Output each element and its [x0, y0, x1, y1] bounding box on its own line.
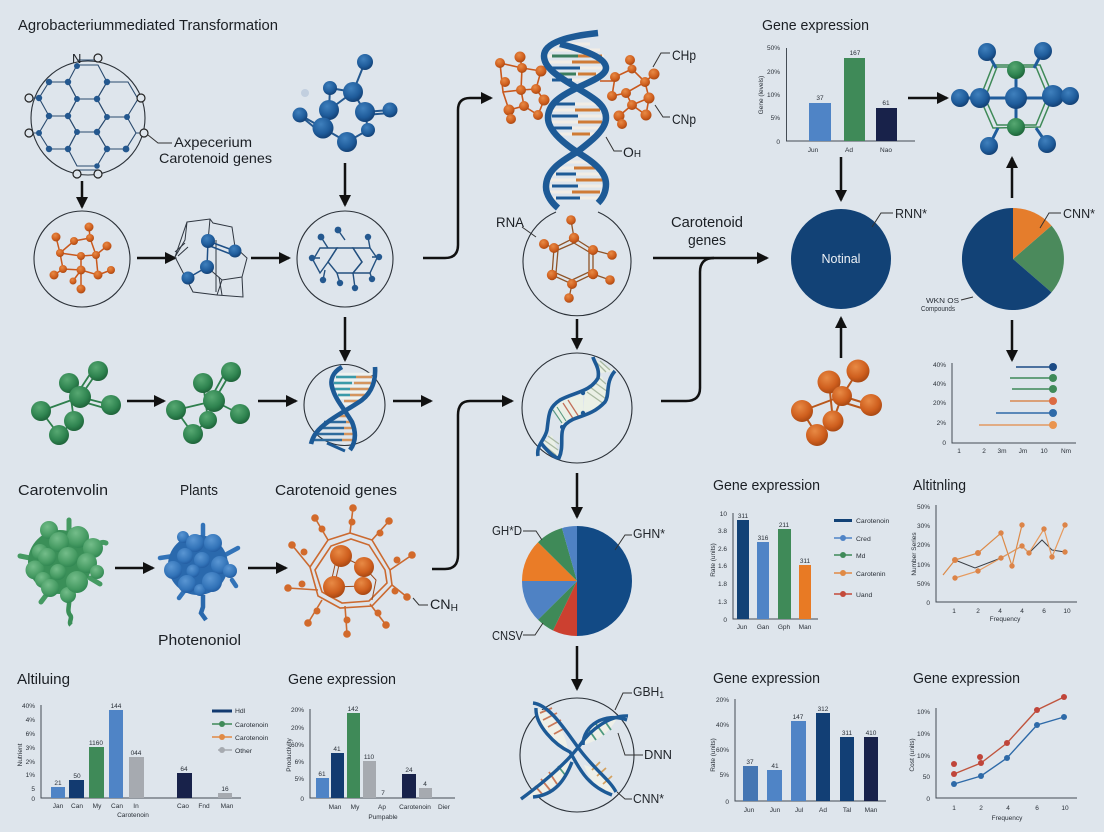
- bar chart: bottom left: Can: [71, 803, 83, 810]
- arrow: elbow to DNA: [423, 98, 491, 258]
- bar chart: top: 0: [776, 139, 780, 146]
- label: Carotenoid genes: Carotenoid genes: [275, 482, 397, 499]
- bar chart: bottom right: Jun: [770, 807, 781, 814]
- heading: Gene expression bottom 2: Gene expression: [713, 670, 820, 687]
- label: Axpecerium Carotenoid genes: [148, 134, 272, 166]
- bar chart: bottom left: Fnd: [198, 803, 210, 810]
- lollipop chart: Nm: [1061, 448, 1071, 455]
- lollipop chart: 40%: [933, 362, 946, 369]
- lollipop chart: 10: [1040, 448, 1048, 455]
- line chart: mid right: [911, 504, 1077, 623]
- bar chart: bottom centre-left: Ap: [378, 804, 386, 811]
- icon: blue protein cluster: [160, 525, 238, 620]
- bar chart: bottom centre-left: Productivity: [286, 737, 293, 772]
- label: GBH: 1: [659, 690, 664, 700]
- bar chart: bottom left: 1%: [26, 772, 35, 779]
- bar chart: bottom right: 147: [793, 714, 804, 721]
- label: GH*D: [492, 523, 542, 540]
- line chart: mid right: 50%: [917, 504, 930, 511]
- label: WKN OS Compounds: Compounds: [921, 306, 955, 313]
- label: Carotenoid genes centre: [671, 214, 743, 249]
- arrow: [115, 567, 153, 569]
- orange molecule right of DNA: [600, 55, 660, 129]
- bar chart: top: [758, 45, 915, 154]
- legend: bottom left: Hdl: [235, 708, 246, 715]
- heading: Gene expression bottom 3: Gene expression: [913, 670, 1020, 687]
- bar chart: top: 10%: [767, 92, 780, 99]
- bar chart: bottom right: 37: [746, 759, 754, 766]
- bar chart: bottom centre-left: 0: [300, 796, 304, 803]
- label: CNSV: CNSV: [492, 628, 523, 643]
- molecule: hexagonal lattice in circle: [25, 51, 148, 178]
- heading: Gene expression mid: Gene expression: [713, 477, 820, 494]
- line chart: mid right: 4: [1020, 608, 1024, 615]
- bar chart: bottom left: [17, 703, 241, 819]
- bar chart: bottom right: Tal: [843, 807, 852, 814]
- label: Axpecerium Carotenoid genes: Carotenoid genes: [159, 150, 272, 166]
- bar chart: bottom centre-left: Dier: [438, 804, 451, 811]
- bar chart: top: 167: [850, 50, 861, 57]
- bar chart: mid right: 2.6: [718, 546, 727, 553]
- line chart: bottom right: 6: [1035, 805, 1039, 812]
- crossed DNA in circle: [520, 698, 634, 812]
- bar chart: bottom left: 144: [111, 703, 122, 710]
- lollipop chart: 2: [982, 448, 986, 455]
- line chart: mid right: 50%: [917, 581, 930, 588]
- arrow: [251, 257, 289, 259]
- label: Carotenvolin: Carotenvolin: [18, 482, 108, 499]
- line chart: bottom right: 10: [1061, 805, 1069, 812]
- bar chart: top: 37: [816, 95, 824, 102]
- arrow: horizontal to Notinal: [653, 257, 767, 259]
- bar chart: mid right: Rate (units): [710, 543, 717, 577]
- bar chart: bottom right: 312: [818, 706, 829, 713]
- bar chart: bottom left: 2%: [26, 759, 35, 766]
- arrow: [576, 646, 578, 689]
- bar chart: top: 5%: [771, 115, 780, 122]
- line chart: bottom right: 10%: [917, 709, 930, 716]
- label: DNN: [618, 733, 672, 762]
- bar chart: mid right: 10: [720, 511, 727, 518]
- label: RNA: [496, 214, 536, 237]
- label: CNp: CNp: [672, 111, 696, 127]
- molecule: blue rings in circle: [297, 211, 393, 307]
- legend: bottom left: Carotenoin: [235, 722, 268, 729]
- line chart: mid right: 4: [998, 608, 1002, 615]
- arrow: [1011, 158, 1013, 198]
- orange molecule left of DNA: [495, 52, 550, 124]
- bar chart: bottom centre-left: Pumpable: [368, 814, 398, 821]
- bar chart: bottom left: 5: [31, 786, 35, 793]
- line chart: bottom right: Frequency: [992, 815, 1023, 822]
- line chart: mid right: 10: [1063, 608, 1071, 615]
- legend: bottom left: Other: [235, 748, 253, 755]
- bar chart: bottom centre-left: 24: [405, 767, 413, 774]
- bar chart: top: Gene (levels): [758, 76, 765, 114]
- label: RNA: RNA: [496, 214, 525, 230]
- bar chart: bottom centre-left: 6%: [295, 759, 304, 766]
- bar chart: bottom right: 5%: [720, 772, 729, 779]
- legend: mid right: Carotenoin: [856, 518, 889, 525]
- bar chart: bottom centre-left: Carotenoin: [399, 804, 431, 811]
- line chart: mid right: Frequency: [990, 616, 1021, 623]
- DNA fragment in circle: [522, 353, 632, 463]
- label: CN H: CN: [430, 596, 450, 612]
- arrow: [840, 157, 842, 200]
- large DNA double helix: [544, 33, 606, 208]
- bar chart: bottom centre-left: 142: [348, 706, 359, 713]
- bar chart: bottom right: 40%: [716, 722, 729, 729]
- bar chart: mid right: 1.3: [718, 599, 727, 606]
- line chart: bottom right: 0: [926, 796, 930, 803]
- heading: Altiluing: Altiluing: [17, 671, 70, 688]
- bar chart: bottom right: 41: [771, 763, 779, 770]
- bar chart: mid right: [710, 511, 818, 631]
- pie chart: right: [962, 208, 1064, 310]
- bar chart: bottom centre-left: 4: [423, 781, 427, 788]
- bar chart: bottom right: 0: [725, 799, 729, 806]
- arrow: elbow to DNA circle: [432, 401, 512, 569]
- bar chart: bottom right: Man: [865, 807, 878, 814]
- bar chart: bottom right: 20%: [716, 697, 729, 704]
- lollipop chart: [933, 362, 1076, 455]
- bar chart: top: 50%: [767, 45, 780, 52]
- molecule: blue and green network: [951, 42, 1079, 155]
- bar chart: bottom left: 50: [73, 773, 81, 780]
- molecule: green right: [166, 362, 250, 444]
- molecule: hexagonal lattice in circle: N: [72, 51, 81, 66]
- bar chart: bottom left: Can: [111, 803, 123, 810]
- label: Plants: Plants: [180, 482, 218, 499]
- bar chart: bottom right: [710, 697, 886, 814]
- bar chart: bottom left: My: [93, 803, 102, 810]
- bar chart: bottom left: 044: [131, 750, 142, 757]
- bar chart: mid right: Gan: [757, 624, 770, 631]
- bar chart: bottom centre-left: 41: [333, 746, 341, 753]
- bar chart: top: Nao: [880, 147, 892, 154]
- label: OH: OH: [623, 144, 641, 160]
- heading: Gene expression bottom 1: Gene expression: [288, 671, 396, 688]
- bar chart: mid right: Gph: [778, 624, 791, 631]
- bar chart: top: Jun: [808, 147, 819, 154]
- arrow: [258, 400, 296, 402]
- label: CHp: [653, 47, 696, 67]
- bar chart: bottom left: 16: [221, 786, 229, 793]
- bar chart: bottom centre-left: 60%: [291, 742, 304, 749]
- arrow: [840, 318, 842, 358]
- label: GHN*: GHN*: [633, 526, 665, 541]
- bar chart: bottom centre-left: 110: [364, 754, 375, 761]
- lollipop chart: 1: [957, 448, 961, 455]
- arrow: [137, 257, 175, 259]
- legend: mid right: Cred: [856, 536, 871, 543]
- label: Carotenoid genes centre: genes: [688, 232, 726, 249]
- bar chart: bottom left: Cao: [177, 803, 189, 810]
- molecule: blue cage: [175, 219, 247, 297]
- bar chart: mid right: 1.6: [718, 563, 727, 570]
- arrow: [576, 473, 578, 517]
- lollipop chart: 3m: [997, 448, 1007, 455]
- label: CNN* right: [1040, 206, 1095, 228]
- bar chart: bottom left: 21: [54, 780, 62, 787]
- label: DNN: DNN: [644, 747, 672, 762]
- bar chart: bottom centre-left: My: [351, 804, 360, 811]
- bar chart: mid right: Jun: [737, 624, 748, 631]
- bar chart: top: 20%: [767, 69, 780, 76]
- line chart: bottom right: 2: [979, 805, 983, 812]
- label: GHN*: [615, 526, 665, 550]
- bar chart: bottom left: Jan: [53, 803, 64, 810]
- legend: mid right: Uand: [856, 592, 872, 599]
- line chart: bottom right: 10%: [917, 731, 930, 738]
- bar chart: bottom right: Rate (units): [710, 738, 717, 772]
- bar chart: bottom right: Jul: [795, 807, 804, 814]
- legend: mid right: Md: [856, 553, 866, 560]
- molecule: blue ball and stick: [292, 54, 398, 152]
- bar chart: bottom left: 6%: [26, 731, 35, 738]
- legend: bottom left: Carotenoin: [235, 735, 268, 742]
- bar chart: mid right: 0: [723, 617, 727, 624]
- bar chart: top: Ad: [845, 147, 853, 154]
- bar chart: bottom right: 60%: [716, 747, 729, 754]
- line chart: bottom right: 4: [1006, 805, 1010, 812]
- bar chart: mid right: 316: [758, 535, 769, 542]
- bar chart: bottom left: 64: [180, 766, 188, 773]
- line chart: mid right: 10%: [917, 562, 930, 569]
- label: CHp: CHp: [672, 47, 696, 63]
- label: RNN*: [872, 206, 927, 227]
- label: GBH: GBH: [633, 684, 661, 699]
- line chart: mid right: 30%: [917, 523, 930, 530]
- bar chart: bottom right: Ad: [819, 807, 827, 814]
- bar chart: mid right: Man: [799, 624, 812, 631]
- arrow: [344, 317, 346, 360]
- label: Axpecerium Carotenoid genes: Axpecerium: [174, 134, 252, 150]
- arrow: [248, 567, 286, 569]
- bar chart: mid right: 211: [779, 522, 790, 529]
- bar chart: bottom centre-left: 61: [318, 771, 326, 778]
- arrow: elbow joining horizontal: [661, 258, 714, 401]
- bar chart: bottom centre-left: 20%: [291, 725, 304, 732]
- bar chart: mid right: 311: [738, 513, 749, 520]
- label: CNSV: [492, 623, 543, 643]
- lollipop chart: 40%: [933, 381, 946, 388]
- label: WKN OS Compounds: [921, 296, 973, 313]
- Notinal circle: Notinal: [822, 252, 860, 266]
- label: RNN*: RNN*: [895, 206, 927, 221]
- bar chart: bottom left: 40%: [22, 703, 35, 710]
- bar chart: bottom centre-left: [286, 706, 455, 821]
- title: Agrobacteriummediated Transformation: [18, 17, 278, 34]
- bar chart: bottom left: In: [133, 803, 139, 810]
- arrow: [576, 319, 578, 348]
- bar chart: bottom centre-left: 7: [381, 790, 385, 797]
- arrow: [127, 400, 164, 402]
- bar chart: bottom right: Jun: [744, 807, 755, 814]
- bar chart: bottom left: Nutrient: [17, 743, 24, 766]
- label: CNN* bottom: [617, 791, 664, 806]
- bar chart: top: 61: [882, 100, 890, 107]
- molecule: green left: [31, 361, 121, 445]
- line chart: mid right: 20%: [917, 542, 930, 549]
- bar chart: bottom left: 4%: [26, 717, 35, 724]
- line chart: mid right: 6: [1042, 608, 1046, 615]
- line chart: mid right: 0: [926, 600, 930, 607]
- label: Photenoniol: Photenoniol: [158, 632, 241, 649]
- DNA in small circle: [304, 364, 385, 451]
- label: OH: [606, 137, 641, 160]
- bar chart: bottom centre-left: 20%: [291, 707, 304, 714]
- label: CN H: [413, 596, 458, 614]
- label: Carotenoid genes centre: Carotenoid: [671, 214, 743, 231]
- arrow: [908, 97, 947, 99]
- lollipop chart: 2%: [937, 420, 946, 427]
- line chart: bottom right: Cost (units): [909, 738, 916, 772]
- arrow: lattice to orange molecule: [81, 181, 83, 207]
- lollipop chart: 0: [942, 440, 946, 447]
- lollipop chart: 20%: [933, 400, 946, 407]
- bar chart: bottom left: 1160: [89, 740, 103, 747]
- bar chart: mid right: 311: [800, 558, 811, 565]
- bar chart: bottom left: Man: [221, 803, 234, 810]
- label: CNp: [655, 105, 696, 127]
- line chart: mid right: 2: [976, 608, 980, 615]
- arrow: [344, 163, 346, 205]
- heading: Altitnling: Altitnling: [913, 477, 966, 494]
- bar chart: bottom left: 3%: [26, 745, 35, 752]
- line chart: mid right: Number Series: [911, 532, 918, 576]
- legend: bottom left: [212, 708, 268, 755]
- lollipop chart: Jm: [1019, 448, 1027, 455]
- line chart: bottom right: 1: [952, 805, 956, 812]
- molecule: orange in circle: [34, 211, 130, 307]
- bar chart: bottom centre-left: Man: [329, 804, 342, 811]
- arrow: [1011, 320, 1013, 360]
- bar chart: bottom right: 311: [842, 730, 853, 737]
- line chart: bottom right: [909, 694, 1077, 822]
- heading: Gene expression top: Gene expression: [762, 17, 869, 34]
- benzene-style orange molecule in circle: [523, 212, 631, 316]
- pie chart: centre: [522, 526, 632, 636]
- bar chart: bottom right: 410: [866, 730, 877, 737]
- bar chart: mid right: 3.8: [718, 528, 727, 535]
- bar chart: bottom left: Carotenoin: [117, 812, 149, 819]
- line chart: mid right: 1: [952, 608, 956, 615]
- arrow: [393, 400, 431, 402]
- line chart: bottom right: 10%: [917, 753, 930, 760]
- legend: mid right: Carotenin: [856, 571, 886, 578]
- legend: mid right: [834, 518, 889, 599]
- Notinal circle: [791, 209, 891, 309]
- line chart: bottom right: 50: [923, 774, 930, 781]
- bar chart: mid right: 1.8: [718, 581, 727, 588]
- icon: green protein cluster: [20, 520, 106, 625]
- label: GH*D: GH*D: [492, 523, 522, 538]
- label: WKN OS Compounds: WKN OS: [926, 296, 959, 305]
- icon: orange ring molecule: [284, 504, 416, 638]
- label: CN H: H: [451, 603, 458, 614]
- label: GBH: [615, 684, 664, 710]
- bar chart: bottom left: 0: [31, 796, 35, 803]
- molecule: orange balls: [791, 360, 882, 446]
- label: CNN* right: CNN*: [1063, 206, 1095, 221]
- label: CNN* bottom: CNN*: [633, 791, 664, 806]
- bar chart: bottom centre-left: 5%: [295, 776, 304, 783]
